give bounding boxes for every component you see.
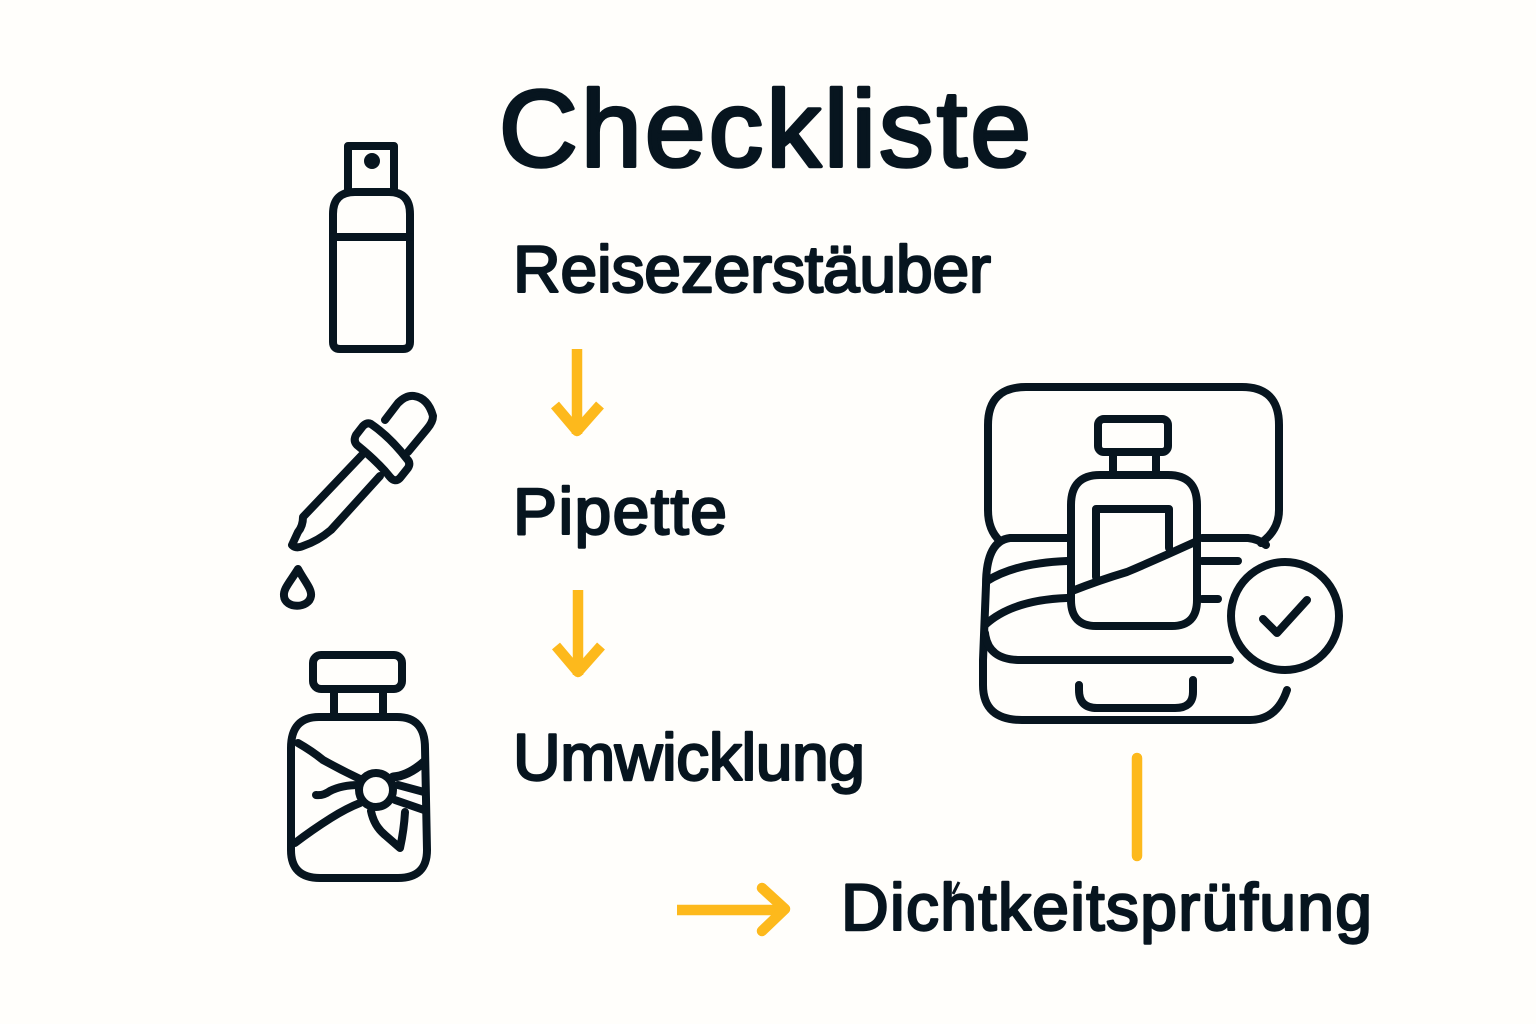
icon: spray bottle: [333, 146, 410, 349]
arrow: to Dichtkeitsprüfung: [677, 888, 785, 931]
label: Reisezerstäuber: Reisezerstäuber: [513, 232, 991, 306]
icon: pipette with drop: [284, 396, 433, 606]
label: Pipette: Pipette: [513, 474, 727, 548]
icon: wrapped perfume bottle: [291, 655, 427, 878]
label: Dichtkeitsprüfung: Dichtkeitsprüfung: [841, 870, 1372, 944]
icon: suitcase with bottle and check: [983, 387, 1339, 720]
label: Umwicklung: Umwicklung: [513, 720, 865, 794]
arrow: Pipette to Umwicklung: [556, 590, 601, 675]
connector: suitcase line: [1132, 758, 1142, 856]
title: Checkliste: [499, 68, 1031, 190]
arrow: Reisezerstäuber to Pipette: [555, 349, 600, 434]
